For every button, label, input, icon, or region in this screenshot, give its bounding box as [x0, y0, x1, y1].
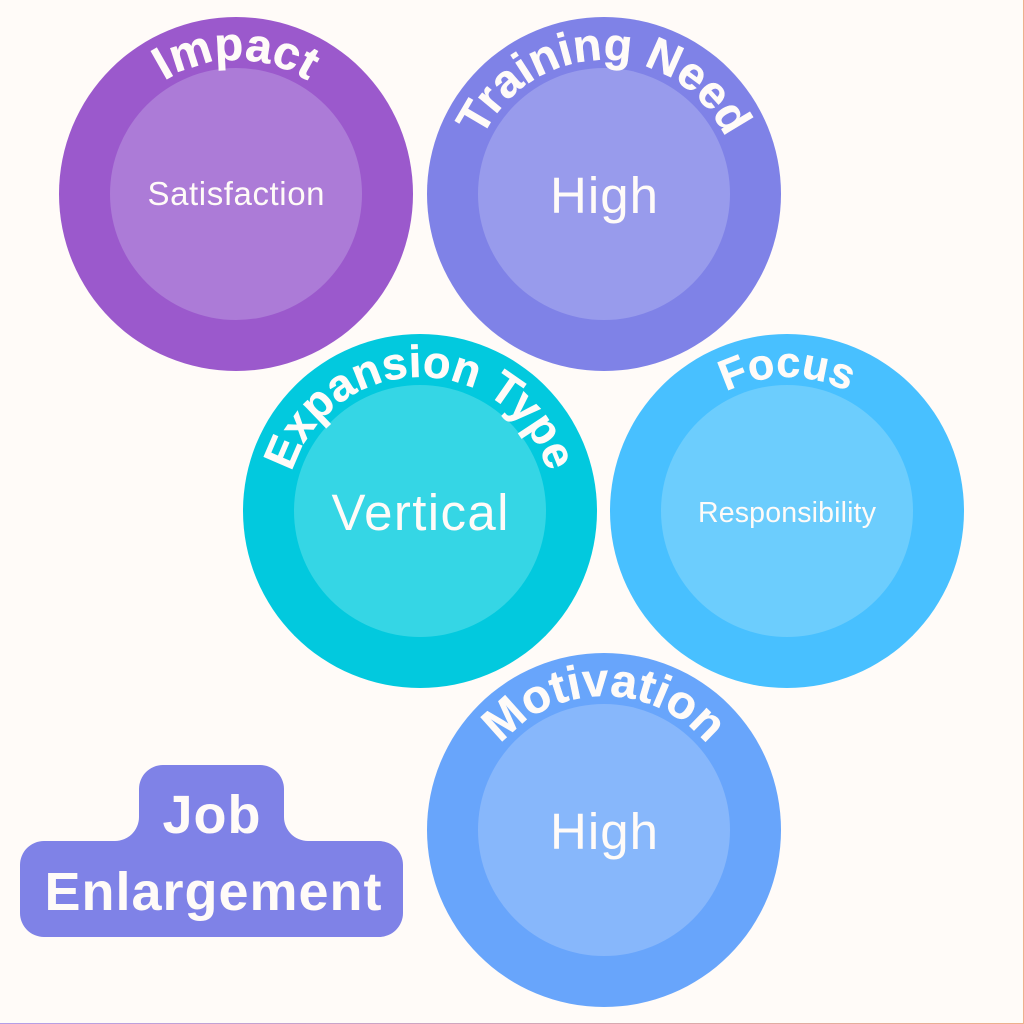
circle: Focus — [610, 334, 964, 688]
value: Vertical: Vertical — [332, 484, 508, 541]
circle: Impact — [59, 17, 413, 371]
value: High: High — [550, 803, 658, 860]
heading: Expansion Type: Expansion Type — [264, 344, 568, 470]
value: Responsibility: Responsibility — [698, 497, 877, 529]
heading: Motivation: Motivation — [480, 664, 720, 742]
title badge: Job Enlargement — [20, 765, 403, 937]
heading: Impact: Impact — [150, 34, 320, 80]
title line: Job: Job — [162, 785, 260, 845]
title line: Enlargement: Enlargement — [44, 862, 382, 922]
heading: Focus: Focus — [717, 354, 853, 390]
circle: Expansion Type — [243, 334, 597, 688]
heading: Training Need: Training Need — [454, 31, 754, 135]
value: Satisfaction: Satisfaction — [148, 175, 324, 212]
circle: Training Need — [427, 17, 781, 371]
value: High: High — [550, 167, 658, 224]
circle: Motivation — [427, 653, 781, 1007]
